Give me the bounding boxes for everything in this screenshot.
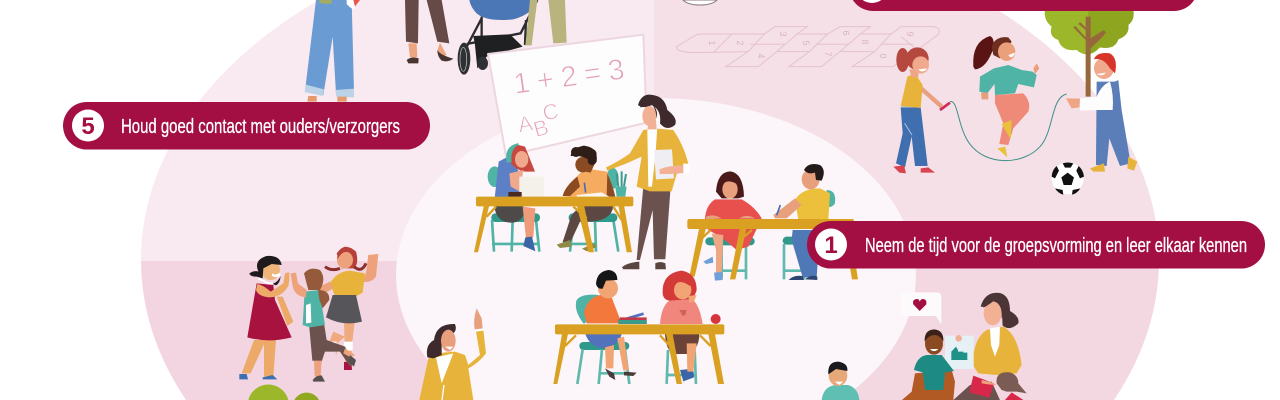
small boy xyxy=(822,362,859,400)
illustration: table with two students and standing teacher xyxy=(474,95,690,269)
icon: apple xyxy=(711,314,721,324)
number badge 1: 1 xyxy=(824,232,838,259)
table xyxy=(687,219,858,279)
whiteboard text: alphabet: B xyxy=(530,114,551,142)
girl in red dress xyxy=(239,256,293,379)
table xyxy=(474,197,633,252)
icon: hopscotch drawn on the ground: 1 xyxy=(707,40,717,46)
tree xyxy=(1045,10,1134,97)
icon: hopscotch drawn on the ground: 0 xyxy=(878,53,888,59)
number badge 5: 5 xyxy=(81,113,95,140)
girl in pink jumper xyxy=(660,271,721,384)
icon: dish at top edge xyxy=(683,0,717,5)
icon: hopscotch drawn on the ground: 9 xyxy=(905,31,915,37)
icon: hopscotch drawn on the ground: 6 xyxy=(841,30,851,36)
icon: hopscotch drawn on the ground xyxy=(677,27,939,67)
illustration: table with boy and red-haired girl xyxy=(553,270,724,384)
boy in orange shirt xyxy=(576,270,647,384)
girl with pink book xyxy=(969,372,1027,400)
icon: hopscotch drawn on the ground: 3 xyxy=(778,31,788,37)
whiteboard text: alphabet xyxy=(516,98,561,142)
icon: hopscotch drawn on the ground: 4 xyxy=(756,53,766,59)
girl jumping xyxy=(973,36,1039,157)
illustration: teacher praising pupils on the floor xyxy=(822,292,1027,400)
whiteboard text: alphabet: C xyxy=(541,98,561,126)
label 5: Houd goed contact met ouders/verzorgers xyxy=(121,116,400,138)
illustration: parents with stroller xyxy=(305,0,567,102)
table xyxy=(553,324,724,384)
girl in red dress xyxy=(703,171,762,281)
boy in yellow shirt xyxy=(773,164,835,280)
callout pill: step 1 xyxy=(807,221,1265,268)
girl in teal top xyxy=(291,269,356,382)
student with headphones xyxy=(488,144,544,252)
callout pill: step 5 xyxy=(63,102,430,150)
icon: hopscotch drawn on the ground: 8 xyxy=(860,39,870,45)
girl with braids xyxy=(325,247,378,370)
whiteboard text: sum: 1+2=3 xyxy=(511,53,627,101)
background: inner ellipse xyxy=(396,98,916,400)
icon: hopscotch drawn on the ground: 5 xyxy=(801,40,811,46)
whiteboard text: alphabet: A xyxy=(516,110,535,138)
girl turning rope left xyxy=(893,47,950,173)
illustration: teacher with raised hand xyxy=(419,308,486,400)
background: outer quadrant ellipse xyxy=(141,0,1159,400)
bushes xyxy=(248,385,319,400)
illustration: whiteboard with sums xyxy=(488,35,647,156)
number badge 5 xyxy=(72,110,104,142)
callout pill: hidden top step xyxy=(849,0,1198,11)
boy turning rope right xyxy=(1066,53,1137,172)
illustration: table with girl and boy writing xyxy=(687,164,858,281)
teacher xyxy=(953,293,1022,400)
illustration: children skipping rope xyxy=(893,10,1137,195)
student with curly hair xyxy=(557,146,627,252)
boy sitting xyxy=(902,329,955,400)
icon: hopscotch drawn on the ground: 2 xyxy=(735,40,745,46)
illustration: children high-fiving xyxy=(239,247,378,400)
speech bubble with heart xyxy=(901,292,941,324)
rope xyxy=(950,94,1067,161)
icon: soccer ball xyxy=(1052,162,1084,195)
card with thumbs up xyxy=(945,335,974,369)
number badge 1 xyxy=(815,228,847,260)
icon: hopscotch drawn on the ground: 7 xyxy=(823,51,833,57)
teacher with papers xyxy=(606,95,690,269)
